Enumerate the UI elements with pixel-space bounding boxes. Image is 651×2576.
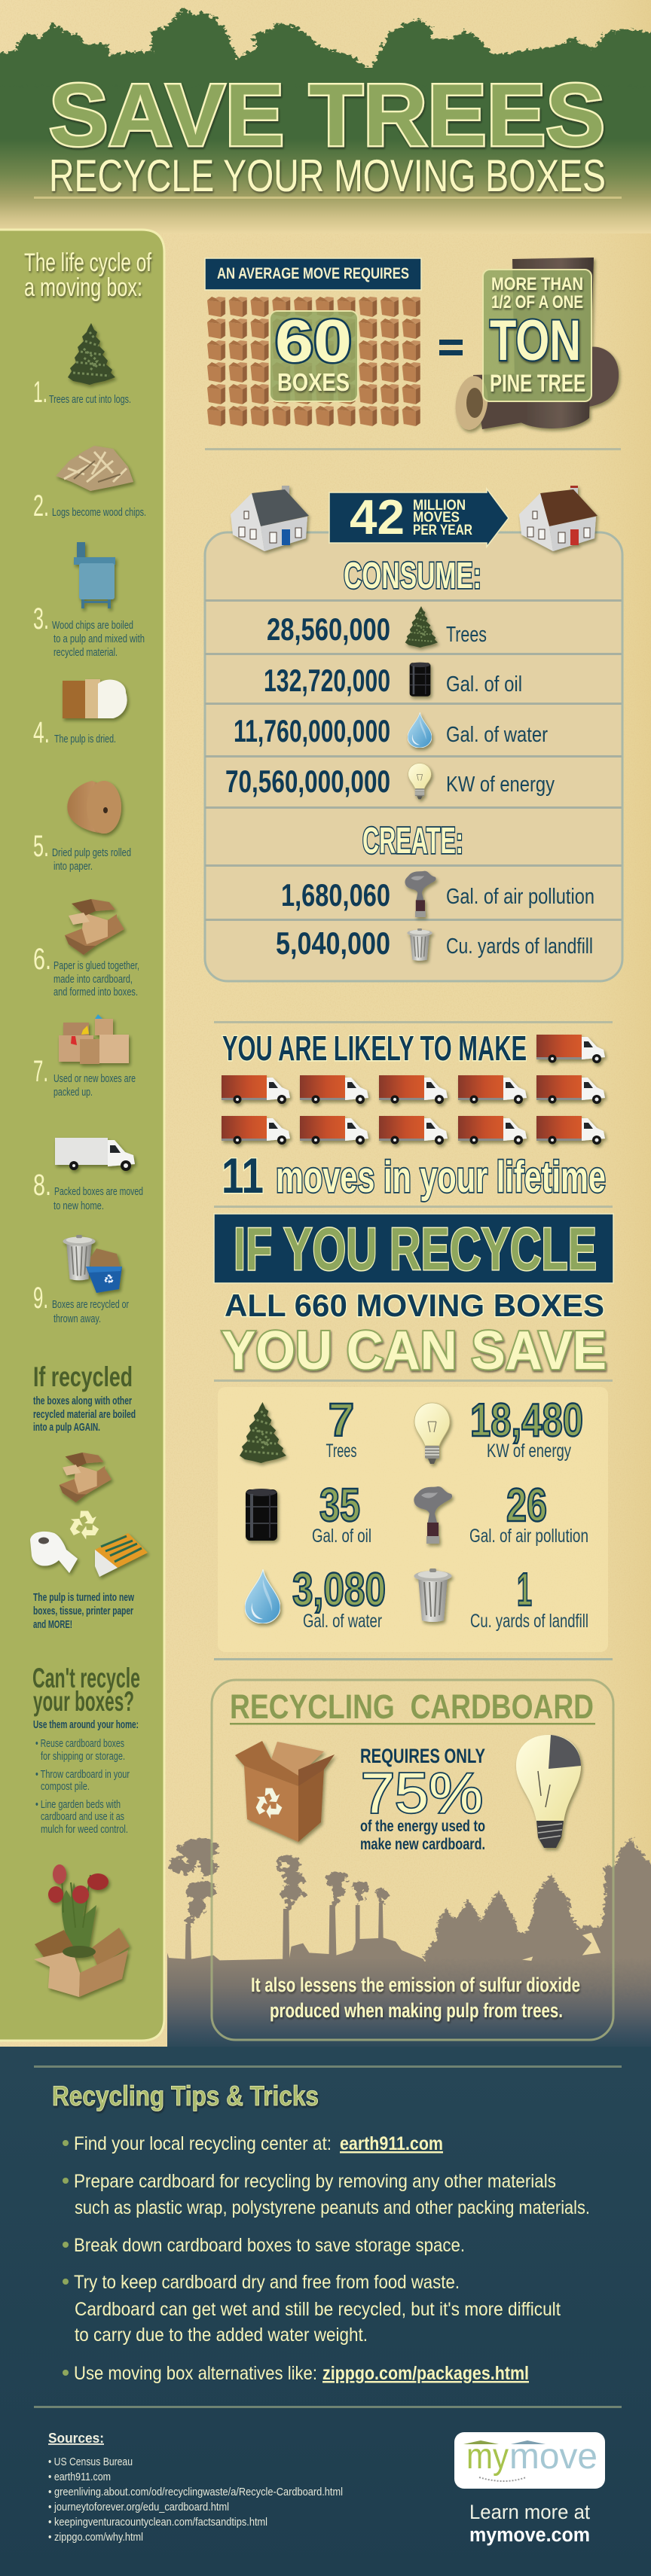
can't recycle block: mulch for weed control.	[41, 1823, 128, 1836]
energy text: make new cardboard.	[360, 1836, 485, 1853]
step 9	[33, 1235, 129, 1325]
logo: mymove	[454, 2432, 605, 2489]
learn more: Learn more at	[469, 2501, 590, 2523]
can't recycle block: • Line garden beds with	[35, 1798, 121, 1811]
step 9: 9.	[33, 1282, 48, 1315]
footer background	[0, 2047, 651, 2576]
saving: water: Gal. of water	[303, 1611, 382, 1632]
step 5: into paper.	[53, 860, 93, 873]
sidebar heading: a moving box:	[24, 273, 142, 302]
saving: landfill	[414, 1564, 588, 1632]
logo: mymove: my	[466, 2437, 509, 2477]
saving: energy: 18,480	[470, 1395, 583, 1447]
ton label: TON	[490, 309, 581, 373]
can't recycle block: • Throw cardboard in your	[35, 1768, 130, 1781]
heading: recycling tips and tricks: Recycling Tips & Tricks	[52, 2081, 319, 2111]
step 1: 1.	[33, 376, 47, 409]
arrow: 42 million moves per year: PER YEAR	[413, 523, 472, 538]
text: 11 moves in your lifetime	[222, 1148, 606, 1203]
pulp text	[33, 1591, 134, 1631]
callout: an average move requires	[205, 258, 421, 290]
if recycled block: the boxes along with other	[33, 1395, 132, 1407]
step 7: 7.	[33, 1055, 48, 1088]
icon: house right	[519, 486, 598, 551]
tips list: earth911.com	[340, 2133, 443, 2154]
text: all 660 moving boxes: ALL 660 MOVING BOXES	[225, 1288, 604, 1323]
60 boxes label: 60	[275, 307, 352, 374]
saving: trees	[240, 1395, 357, 1463]
step 6: and formed into boxes.	[53, 986, 138, 998]
sources: Sources:	[48, 2431, 104, 2446]
panel: consume and create	[205, 532, 622, 981]
step 5	[33, 781, 131, 873]
tips list	[63, 2133, 590, 2384]
saving: air pollution: 26	[506, 1480, 547, 1532]
sidebar heading: The life cycle of	[24, 248, 151, 277]
step 4	[33, 679, 127, 749]
step 2: Logs become wood chips.	[52, 506, 146, 519]
sidebar heading	[24, 248, 151, 302]
can't recycle block: cardboard and use it as	[41, 1810, 124, 1823]
icon: recycling box	[235, 1741, 335, 1842]
step 5: Dried pulp gets rolled	[52, 846, 131, 859]
panel: recycling cardboard	[212, 1680, 613, 2040]
ton label: PINE TREE	[490, 370, 585, 397]
step 8: 8.	[33, 1169, 51, 1202]
saving: water: 3,080	[292, 1564, 386, 1616]
step 6: made into cardboard,	[53, 973, 133, 986]
text: you can save: YOU CAN SAVE	[222, 1321, 607, 1381]
step 4: The pulp is dried.	[54, 733, 116, 745]
sources: • zippgo.com/why.html	[48, 2531, 143, 2544]
row: water	[234, 712, 548, 748]
can't recycle block: • Reuse cardboard boxes	[35, 1737, 124, 1750]
callout: an average move requires: AN AVERAGE MOVE REQUIRES	[217, 265, 409, 282]
tips list: Prepare cardboard for recycling by removing any other materials	[74, 2171, 556, 2192]
row: air pollution: 1,680,060	[281, 877, 390, 913]
step 3: to a pulp and mixed with	[53, 633, 145, 645]
truck icons: 11 moves	[222, 1035, 605, 1145]
step 1	[33, 323, 131, 409]
saving: energy: KW of energy	[487, 1440, 571, 1462]
if recycled block: recycled material are boiled	[33, 1408, 136, 1421]
ton label	[483, 270, 591, 401]
row: energy	[225, 764, 555, 799]
row: energy: KW of energy	[446, 773, 555, 797]
saving: air pollution: Gal. of air pollution	[469, 1526, 588, 1547]
can't recycle block: your boxes?	[33, 1686, 134, 1717]
row: oil: Gal. of oil	[446, 672, 522, 697]
row: water: Gal. of water	[446, 723, 548, 747]
step 9: thrown away.	[53, 1312, 101, 1325]
saving: oil: 35	[319, 1480, 360, 1532]
panel: city skyline and trees	[167, 1837, 651, 2048]
saving: landfill: 1	[517, 1564, 532, 1616]
step 8: to new home.	[53, 1200, 104, 1212]
sources	[48, 2431, 343, 2544]
step 2	[33, 446, 146, 523]
tips list: Cardboard can get wet and still be recycled, but it's more difficult	[75, 2299, 561, 2320]
energy text: of the energy used to	[360, 1818, 485, 1835]
can't recycle block: Can't recycle	[32, 1663, 140, 1693]
pulp text: boxes, tissue, printer paper	[33, 1605, 133, 1617]
tips list: Try to keep cardboard dry and free from food waste.	[74, 2272, 460, 2293]
saving: water	[245, 1564, 386, 1632]
60 boxes label: BOXES	[277, 368, 350, 396]
saving: oil	[246, 1480, 371, 1547]
pulp text: The pulp is turned into new	[33, 1591, 134, 1604]
saving: air pollution	[414, 1480, 588, 1547]
row: landfill: Cu. yards of landfill	[446, 934, 593, 959]
text: 11 moves in your lifetime: 11	[222, 1148, 264, 1203]
row: trees: 28,560,000	[267, 611, 390, 647]
icon: printer paper	[95, 1533, 148, 1577]
step 6: Paper is glued together,	[53, 959, 139, 972]
icon: toilet roll	[30, 1532, 78, 1573]
sources: • greenliving.about.com/od/recyclingwaste/a/Recycle-Cardboard.html	[48, 2486, 343, 2498]
row: landfill	[276, 925, 593, 961]
arrow: 42 million moves per year: MOVES	[413, 510, 460, 526]
box grid: 60 boxes	[206, 297, 423, 428]
heading: create: CREATE:	[362, 821, 463, 861]
can't recycle block: compost pile.	[41, 1780, 90, 1793]
arrow: 42 million moves per year	[329, 489, 509, 547]
row: energy: 70,560,000,000	[225, 764, 390, 799]
heading: consume: CONSUME:	[344, 556, 481, 596]
saving: trees: 7	[329, 1395, 354, 1447]
step 3: recycled material.	[53, 646, 118, 659]
icon: bulb with 75 percent pie	[516, 1735, 581, 1848]
step 6	[33, 899, 139, 998]
if recycled block: into a pulp AGAIN.	[33, 1421, 100, 1434]
panel: savings grid	[218, 1387, 608, 1652]
step 8: Packed boxes are moved	[54, 1185, 143, 1198]
tips list: Use moving box alternatives like:	[74, 2363, 317, 2384]
step 7: Used or new boxes are	[53, 1072, 136, 1085]
step 7	[33, 1014, 136, 1099]
row: oil	[264, 663, 522, 698]
energy text: REQUIRES ONLY	[360, 1745, 485, 1767]
row: air pollution: Gal. of air pollution	[446, 885, 594, 909]
step 7: packed up.	[53, 1086, 93, 1099]
saving: landfill: Cu. yards of landfill	[470, 1611, 588, 1632]
sulfur dioxide note: produced when making pulp from trees.	[270, 1999, 563, 2022]
row: water: 11,760,000,000	[234, 713, 390, 748]
energy text: 75%	[361, 1761, 483, 1825]
tips list: zippgo.com/packages.html	[322, 2363, 529, 2384]
header forest band	[0, 8, 651, 233]
icon: tulips in box	[34, 1864, 130, 1997]
row: trees	[267, 606, 487, 648]
sources: • US Census Bureau	[48, 2456, 133, 2468]
step 8	[33, 1138, 143, 1212]
arrow: 42 million moves per year: MILLION	[413, 498, 466, 514]
sulfur dioxide note	[251, 1974, 580, 2022]
can't recycle block	[32, 1663, 140, 1836]
sources: • journeytoforever.org/edu_cardboard.html	[48, 2501, 229, 2514]
row: trees: Trees	[446, 623, 487, 647]
ton label: 1/2 OF A ONE	[491, 292, 583, 312]
logo: mymove: move	[509, 2437, 598, 2477]
row: oil: 132,720,000	[264, 663, 390, 698]
saving: oil: Gal. of oil	[312, 1526, 371, 1547]
panel: life cycle sidebar	[0, 230, 164, 2041]
tips list: Break down cardboard boxes to save storage space.	[74, 2235, 465, 2256]
step 4: 4.	[33, 716, 50, 749]
row: landfill: 5,040,000	[276, 925, 390, 961]
step 5: 5.	[33, 830, 49, 863]
step 3: 3.	[33, 602, 49, 636]
sources: • earth911.com	[48, 2471, 111, 2483]
learn more: mymove.com	[469, 2523, 590, 2546]
step 3	[33, 542, 145, 659]
pulp text: and MORE!	[33, 1618, 72, 1631]
title: save trees: SAVE TREES	[49, 66, 605, 164]
step 9: Boxes are recycled or	[52, 1298, 129, 1311]
tips list: Find your local recycling center at:	[74, 2133, 332, 2154]
step 6: 6.	[33, 943, 51, 976]
saving: trees: Trees	[326, 1440, 357, 1462]
icon: logs with ton label	[452, 258, 619, 432]
box pile icon	[60, 1453, 112, 1502]
sources: • keepingventuracountyclean.com/factsandtips.html	[48, 2516, 267, 2529]
energy text	[360, 1745, 485, 1853]
ton label: MORE THAN	[491, 274, 583, 294]
equals sign	[439, 340, 463, 355]
row: air pollution	[281, 871, 594, 917]
icon: house left	[231, 486, 309, 551]
tips list: such as plastic wrap, polystyrene peanuts and other packing materials.	[75, 2197, 590, 2218]
recycle symbol	[66, 1511, 99, 1542]
step 2: 2.	[33, 489, 49, 523]
if recycled block: If recycled	[33, 1361, 133, 1392]
can't recycle block: for shipping or storage.	[41, 1750, 125, 1763]
arrow: 42 million moves per year: 42	[350, 489, 405, 544]
can't recycle block: Use them around your home:	[33, 1718, 139, 1731]
tips list: to carry due to the added water weight.	[75, 2324, 368, 2346]
if recycled block	[33, 1361, 136, 1434]
60 boxes label	[270, 307, 358, 401]
saving: energy	[414, 1395, 583, 1464]
step 3: Wood chips are boiled	[52, 619, 133, 632]
step 1: Trees are cut into logs.	[49, 393, 131, 406]
learn more	[469, 2501, 590, 2546]
